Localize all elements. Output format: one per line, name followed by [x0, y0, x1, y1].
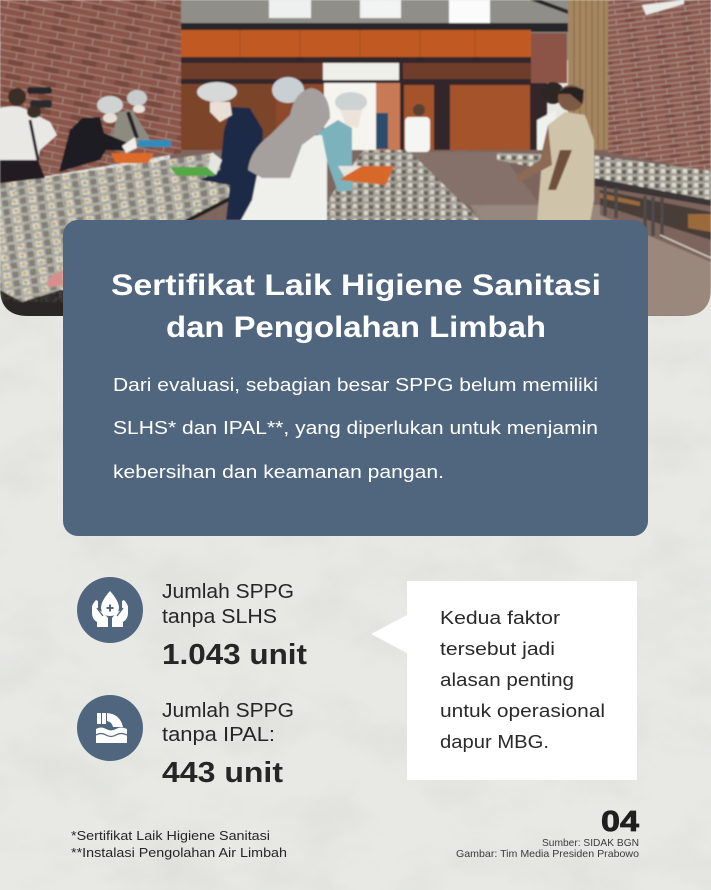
- callout: speech bubble: tersebut jadi: [440, 638, 555, 659]
- callout: speech bubble: Kedua faktor: [440, 607, 560, 628]
- stat: SPPG without IPAL: [162, 700, 294, 789]
- photo: left brick wall: [0, 0, 181, 184]
- callout: speech bubble: untuk operasional: [440, 700, 605, 721]
- photo: air conditioner: [642, 0, 684, 15]
- callout: speech bubble: dapur MBG.: [440, 731, 549, 752]
- photo: right table with trays: [497, 153, 711, 258]
- photo: worker in navy shirt: [170, 82, 263, 220]
- description text: Dari evaluasi, sebagian besar SPPG belum memiliki: [113, 374, 598, 395]
- photo: worker with blue tray: [111, 90, 171, 148]
- photo: right small brick wall: [531, 33, 567, 83]
- photo: workers preparing meal trays in a kitchen hall: [0, 0, 711, 320]
- photo: worker behind in hairnet: [272, 77, 304, 103]
- callout: speech bubble: alasan penting: [440, 669, 574, 690]
- heading: [111, 269, 601, 344]
- stat: SPPG without IPAL: tanpa IPAL:: [162, 724, 275, 746]
- photo: woman in white shirt: [240, 135, 327, 222]
- photo: orange wall band: [181, 30, 531, 60]
- heading: dan Pengolahan Limbah: [166, 311, 546, 344]
- panel: title and description: [63, 220, 648, 536]
- photo: man in white at the door: [376, 104, 430, 152]
- photo: worker in black by the left table: [59, 96, 154, 172]
- photo: official behind: [537, 82, 564, 150]
- stat: SPPG without SLHS: 1.043 unit: [162, 639, 307, 671]
- photo: centre table with trays: [313, 150, 481, 221]
- description text: [113, 374, 598, 482]
- photo: back glass wall: [170, 57, 547, 154]
- stat: SPPG without SLHS: [162, 581, 307, 671]
- source credits: Sumber: SIDAK BGN: [542, 837, 639, 849]
- source credits: [456, 837, 639, 860]
- photo: ceiling: [180, 0, 569, 60]
- footnotes: **Instalasi Pengolahan Air Limbah: [71, 845, 287, 860]
- footnotes: [71, 828, 287, 860]
- photo: right brick wall: [608, 0, 711, 172]
- description text: kebersihan dan keamanan pangan.: [113, 461, 444, 482]
- stat: SPPG without SLHS: Jumlah SPPG: [162, 581, 294, 603]
- photo: grey hijab: [248, 88, 330, 178]
- photo: wood slat panel: [568, 0, 609, 150]
- description text: SLHS* dan IPAL**, yang diperlukan untuk menjamin: [113, 417, 598, 438]
- footnotes: *Sertifikat Laik Higiene Sanitasi: [71, 828, 270, 843]
- stat: SPPG without IPAL: Jumlah SPPG: [162, 700, 294, 722]
- heading: Sertifikat Laik Higiene Sanitasi: [111, 269, 601, 302]
- stat: SPPG without SLHS: tanpa SLHS: [162, 606, 277, 628]
- icon: hands holding water drop: [77, 577, 143, 643]
- photo: Prabowo in beige safari shirt: [516, 85, 594, 222]
- photo: cameraman: [0, 87, 57, 183]
- icon: wastewater pipe over water: [77, 695, 143, 761]
- stat: SPPG without IPAL: 443 unit: [162, 757, 283, 789]
- callout: speech bubble: [371, 581, 637, 780]
- photo: left table with trays: [0, 153, 233, 320]
- photo: worker in light-blue shirt: [317, 92, 394, 192]
- photo: floor: [170, 150, 711, 320]
- source credits: Gambar: Tim Media Presiden Prabowo: [456, 848, 639, 860]
- page number: 04: [601, 806, 639, 838]
